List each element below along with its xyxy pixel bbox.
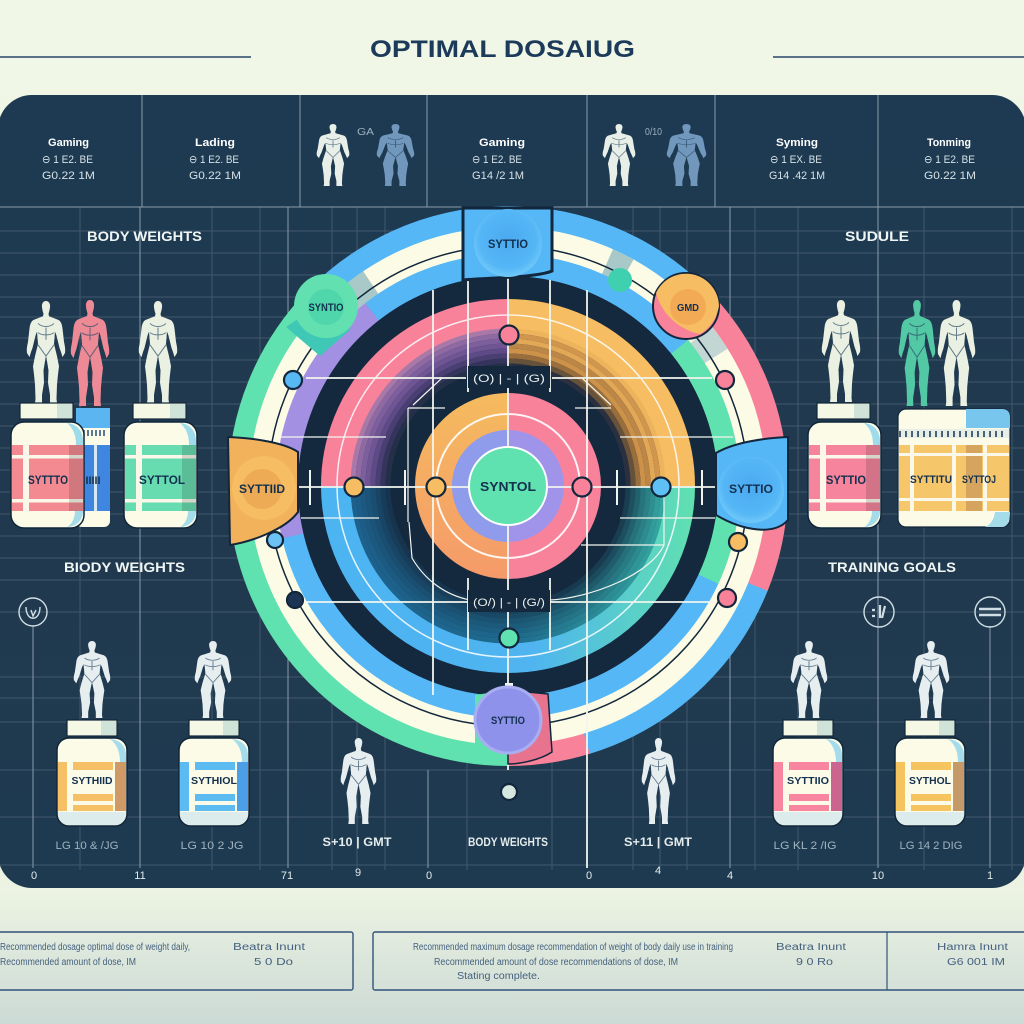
cell: Tonming: ⊖ 1 E2. BE bbox=[924, 154, 975, 166]
footer note box right: Recommended maximum dosage recommendation of weight of body daily use in training bbox=[413, 942, 733, 953]
green bottle bbox=[124, 403, 197, 528]
footer note box right: G6 001 IM bbox=[947, 957, 1005, 968]
cell: Tonming: G0.22 1M bbox=[924, 170, 976, 182]
middle ring bbox=[336, 314, 680, 658]
axis numbers: 9 bbox=[355, 867, 361, 879]
core symbol: SYNTOL bbox=[480, 479, 536, 494]
node markers bbox=[267, 268, 747, 800]
cell: Gaming: Gaming bbox=[48, 137, 89, 149]
lower caption left: S+10 | GMT bbox=[322, 835, 392, 849]
main dark panel bbox=[0, 95, 1024, 888]
lower bottle blue bbox=[179, 720, 249, 826]
lower bottle pink: SYTTIIO bbox=[787, 775, 829, 787]
cell: Gaming middle: ⊖ 1 E2. BE bbox=[472, 154, 522, 166]
upper-left badge: SYNTIO bbox=[308, 302, 344, 314]
top badge: SYTTIO bbox=[488, 237, 528, 251]
title: OPTIMAL DOSAIUG bbox=[370, 36, 635, 63]
footer note box right: 9 0 Ro bbox=[796, 957, 834, 968]
axis numbers: 11 bbox=[134, 870, 146, 882]
label box bottom bbox=[468, 590, 550, 612]
node: blue upper-left bbox=[284, 371, 302, 389]
wide yellow jar: SYTTITU bbox=[910, 474, 952, 486]
circle icon right bbox=[975, 597, 1005, 627]
axis numbers: 4 bbox=[727, 870, 733, 882]
side heading: training goals: TRAINING GOALS bbox=[828, 559, 956, 575]
upper-right badge bbox=[653, 273, 719, 339]
dark interior bbox=[298, 276, 718, 696]
pink bottle right: SYTTIO bbox=[826, 473, 866, 487]
ring texture lower bbox=[350, 486, 666, 644]
small figure right bbox=[642, 738, 675, 824]
node: navy lower-left bbox=[287, 592, 303, 608]
node: pink top axis bbox=[500, 326, 518, 344]
core symbol bbox=[469, 447, 547, 525]
footer note box left: Beatra Inunt bbox=[233, 942, 305, 953]
label box top: (O) | - | (G) bbox=[473, 373, 545, 385]
header strip: summary cells bbox=[42, 137, 976, 182]
lower figure 2 bbox=[195, 641, 231, 718]
bottom badge: SYTTIO bbox=[491, 715, 525, 727]
blue bottle bbox=[76, 408, 110, 527]
cell: Gaming: G0.22 1M bbox=[42, 170, 95, 182]
footer note box right: Hamra Inunt bbox=[937, 942, 1008, 953]
cell: Gaming middle: Gaming bbox=[479, 137, 525, 149]
left badge: SYTTIID bbox=[239, 482, 285, 496]
left badge bbox=[228, 437, 298, 545]
header figures right: 0/10 bbox=[645, 127, 662, 138]
top badge bbox=[463, 208, 552, 280]
figures over upper-left bottles bbox=[27, 300, 177, 406]
side heading: body weights top: BODY WEIGHTS bbox=[87, 228, 202, 244]
label box top bbox=[468, 366, 550, 388]
upper-left badge bbox=[286, 274, 358, 356]
lower figure 4 bbox=[913, 641, 949, 718]
cell: Gaming bbox=[42, 137, 95, 182]
cell: Lading: G0.22 1M bbox=[189, 170, 241, 182]
header figures left: GA bbox=[357, 127, 374, 138]
lower bottle pink bbox=[773, 720, 843, 826]
header figures left bbox=[317, 124, 414, 186]
axis numbers bbox=[31, 865, 993, 882]
node: blue outer right bbox=[652, 478, 670, 496]
figures over upper-right bottles bbox=[822, 300, 975, 406]
pink bottle left bbox=[11, 403, 84, 528]
footer note box right bbox=[373, 932, 1024, 990]
ring texture upper right bbox=[508, 329, 665, 486]
node: green bottom axis bbox=[500, 628, 518, 648]
lower bottle blue: SYTHIOL bbox=[191, 775, 238, 787]
wide yellow jar: SYTTOJ bbox=[962, 474, 996, 486]
green bottle: SYTTOL bbox=[139, 473, 185, 487]
footer note box left bbox=[0, 932, 353, 990]
upper-right badge: GMD bbox=[677, 303, 699, 314]
cell: Gaming: ⊖ 1 E2. BE bbox=[42, 154, 93, 166]
lower bottle yellow: SYTHOL bbox=[909, 775, 952, 787]
footer note box right: Recommended amount of dose recommendations of dose, IM bbox=[434, 957, 678, 968]
node: orange lower-right bbox=[729, 533, 747, 551]
axis numbers: 10 bbox=[872, 870, 884, 882]
footer note box left: Recommended dosage optimal dose of weight daily, bbox=[0, 942, 190, 953]
cell: Tonming: Tonming bbox=[927, 137, 971, 149]
right badge: SYTTIO bbox=[729, 482, 773, 496]
side heading: schedule: SUDULE bbox=[845, 228, 909, 244]
dose label blue: LG 10 2 JG bbox=[180, 840, 244, 852]
outer ring bbox=[127, 105, 889, 867]
node: pink upper-right bbox=[716, 371, 734, 389]
circle icon left bbox=[19, 598, 47, 626]
cell: Lading: Lading bbox=[195, 137, 235, 149]
lower bottle orange: SYTHIID bbox=[72, 775, 113, 787]
cell: Syming: ⊖ 1 EX. BE bbox=[770, 154, 822, 166]
axis numbers: 0 bbox=[586, 870, 592, 882]
pink bottle left: SYTTTO bbox=[28, 473, 68, 487]
lower caption right: S+11 | GMT bbox=[624, 835, 693, 849]
label box bottom: (O/) | - | (G/) bbox=[473, 597, 545, 609]
node: pink inner right bbox=[572, 478, 592, 496]
footer note box left: Recommended amount of dose, IM bbox=[0, 957, 136, 968]
lower figure 1 bbox=[74, 641, 110, 718]
cell: Syming: Syming bbox=[776, 137, 818, 149]
lower caption centre: BODY WEIGHTS bbox=[468, 835, 548, 849]
footer note box right: Stating complete. bbox=[457, 971, 540, 982]
node: light blue lower-left bbox=[267, 532, 283, 548]
central dosage ring chart bbox=[228, 206, 786, 868]
dose label pink: LG KL 2 /IG bbox=[774, 840, 836, 852]
node: pale bottom bbox=[501, 784, 517, 800]
cell: Tonming bbox=[924, 137, 976, 182]
footer note box right: Beatra Inunt bbox=[776, 942, 846, 953]
pink bottle right bbox=[808, 403, 881, 528]
axis numbers: 1 bbox=[987, 870, 993, 882]
bottom badge bbox=[475, 683, 552, 764]
axis numbers: 0 bbox=[31, 870, 37, 882]
node: teal top bbox=[608, 268, 632, 292]
wide yellow jar bbox=[898, 409, 1010, 527]
node: orange inner left bbox=[426, 478, 446, 496]
axis numbers: 4 bbox=[655, 865, 661, 877]
connector lines bbox=[280, 215, 733, 868]
circle icon middle bbox=[864, 597, 894, 627]
node: orange outer left bbox=[344, 478, 364, 496]
small figure left bbox=[341, 738, 376, 824]
footer note box left: 5 0 Do bbox=[254, 957, 294, 968]
cell: Syming: G14 .42 1M bbox=[769, 170, 825, 182]
dose label yellow: LG 14 2 DIG bbox=[900, 840, 962, 852]
cell: Lading bbox=[189, 137, 241, 182]
header figures right bbox=[603, 124, 706, 186]
side heading: body weights lower: BIODY WEIGHTS bbox=[64, 559, 185, 575]
lower figure 3 bbox=[791, 641, 827, 718]
lower bottle orange bbox=[57, 720, 127, 826]
right badge bbox=[716, 437, 788, 530]
ring texture upper left bbox=[350, 328, 508, 486]
axis numbers: 71 bbox=[281, 870, 293, 882]
cell: Lading: ⊖ 1 E2. BE bbox=[189, 154, 239, 166]
cell: Syming bbox=[769, 137, 825, 182]
node: pink lower-right bbox=[718, 589, 736, 607]
axis numbers: 0 bbox=[426, 870, 432, 882]
cell: Gaming middle bbox=[472, 137, 525, 182]
lower bottle yellow bbox=[895, 720, 965, 826]
dose label orange: LG 10 & /JG bbox=[56, 840, 118, 852]
core dose circle bbox=[415, 393, 601, 579]
blue bottle: IIIII bbox=[86, 475, 100, 487]
cell: Gaming middle: G14 /2 1M bbox=[472, 170, 524, 182]
